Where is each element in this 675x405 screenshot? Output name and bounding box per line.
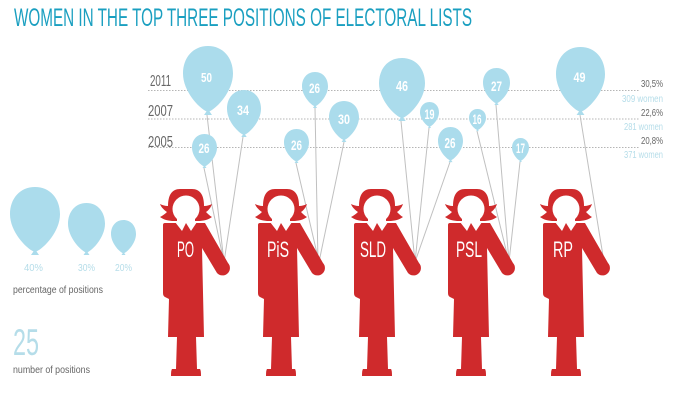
totals: 2011: 30,5% (641, 79, 663, 90)
totals: 2011 (622, 79, 663, 105)
balloon: PSL 2005 (512, 138, 529, 162)
balloon: PO 2011: 50 (201, 70, 212, 85)
balloon strings (204, 105, 604, 262)
legend: number of positions: number of positions (13, 365, 90, 376)
balloon: PSL 2007: 16 (472, 111, 482, 127)
balloon: PiS 2005: 26 (291, 137, 302, 153)
legend: balloon size: 30% (78, 263, 95, 274)
balloon: PSL 2011 (483, 68, 510, 105)
balloon: SLD 2007 (420, 102, 439, 128)
totals: 2007: 281 women (624, 122, 663, 133)
year labels: 2011 (150, 73, 171, 90)
year gridlines (148, 90, 640, 148)
balloon: PiS 2007 (329, 101, 359, 142)
balloon: SLD 2005: 26 (444, 135, 456, 152)
balloon: SLD 2007: 19 (424, 106, 435, 122)
balloon: PSL 2007 (469, 109, 486, 131)
legend: balloon size (10, 187, 136, 296)
balloon: PiS 2011: 26 (309, 80, 320, 96)
legend: number of positions (13, 322, 90, 376)
balloon: RP 2011 (556, 47, 605, 115)
balloon: PSL 2005: 17 (516, 140, 525, 156)
balloon: PO 2007 (227, 90, 261, 137)
balloon: PiS 2011 (302, 72, 328, 108)
figure: SLD: SLD (360, 237, 386, 262)
totals: 2005 (624, 136, 663, 161)
figure: PO (160, 189, 230, 376)
balloon: SLD 2011 (379, 58, 425, 121)
totals: 2005: 20,8% (641, 136, 663, 147)
legend: number of positions: 25 (13, 322, 39, 363)
figure: SLD (351, 189, 421, 376)
figure: RP: RP (553, 237, 573, 262)
balloon: RP 2011: 49 (574, 69, 586, 85)
totals: 2005: 371 women (624, 150, 663, 161)
balloon: SLD 2011: 46 (396, 78, 408, 95)
balloon: PSL 2011: 27 (491, 78, 502, 94)
figure: PO: PO (177, 237, 194, 262)
balloon: PO 2007: 34 (237, 102, 249, 118)
balloon: PiS 2007: 30 (338, 111, 350, 127)
year labels: 2007 (148, 103, 173, 120)
legend: balloon size: percentage of positions (13, 285, 103, 296)
totals: 2011: 309 women (622, 94, 663, 105)
figure: PiS (255, 189, 325, 376)
totals: 2007 (624, 108, 663, 133)
balloon: PiS 2005 (284, 129, 309, 163)
year labels (148, 73, 173, 151)
figure: PiS: PiS (267, 237, 289, 262)
balloon: PO 2005: 26 (198, 140, 210, 156)
legend: balloon size: 40% (24, 263, 43, 274)
figure: PSL (445, 189, 515, 376)
legend: balloon size: 20% (115, 263, 132, 274)
balloon: PO 2011 (183, 46, 233, 115)
figure: PSL: PSL (456, 237, 482, 262)
year labels: 2005 (148, 134, 173, 151)
balloon: PO 2005 (192, 134, 217, 168)
totals: 2007: 22,6% (641, 108, 663, 119)
figure: RP (540, 189, 610, 376)
balloon: SLD 2005 (438, 127, 463, 162)
